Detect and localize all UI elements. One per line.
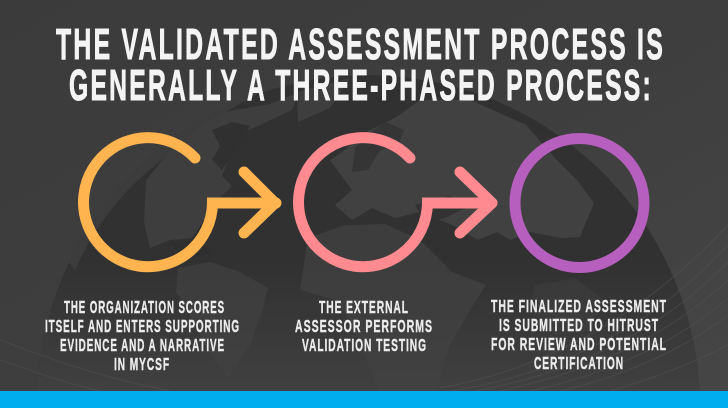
text: phase two description: VALIDATION TESTING: [302, 335, 427, 355]
text: phase one description: [45, 297, 240, 374]
text: phase two description: [295, 297, 433, 355]
background with globe map: [0, 76, 728, 391]
title: [56, 20, 665, 110]
text: phase one description: ITSELF AND ENTERS SUPPORTING: [45, 316, 240, 336]
text: phase two description: THE EXTERNAL: [319, 297, 409, 317]
icon: orange circle with arrow: [84, 138, 276, 267]
text: phase two description: ASSESSOR PERFORMS: [295, 316, 433, 336]
text: phase one description: THE ORGANIZATION SCORES: [64, 297, 225, 317]
footer bar: [0, 391, 728, 408]
text: phase one description: IN MYCSF: [114, 354, 170, 374]
icon: purple circle: [515, 138, 644, 268]
icon: pink circle with arrow: [299, 138, 492, 267]
text: phase three description: [491, 296, 667, 373]
text: phase one description: EVIDENCE AND A NARRATIVE: [60, 335, 225, 355]
text: phase three description: CERTIFICATION: [534, 353, 624, 373]
